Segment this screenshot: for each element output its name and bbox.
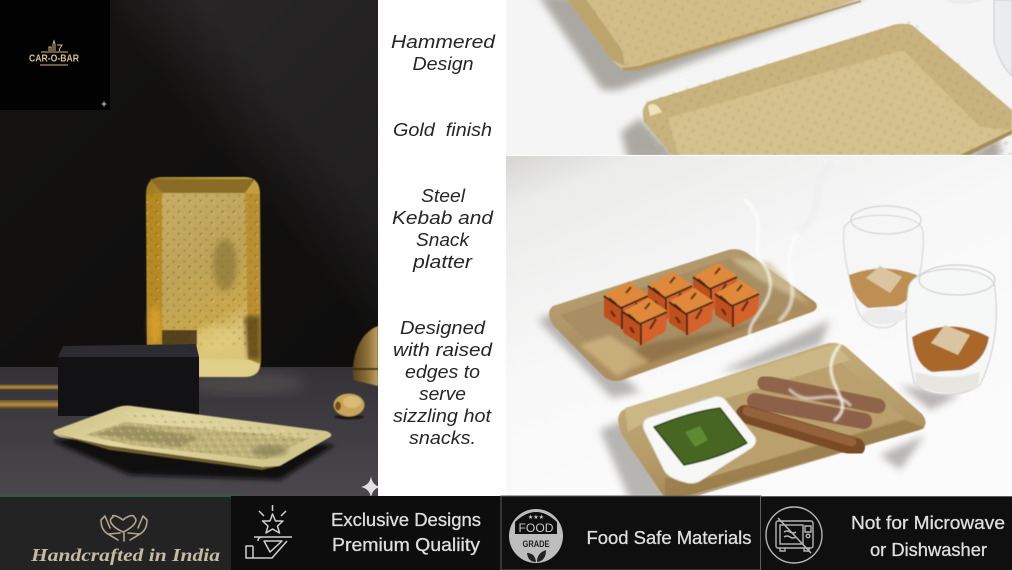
icon: crossed microwave bbox=[766, 507, 822, 563]
feature: steel kebab and snack platter: Snack bbox=[416, 230, 470, 250]
icon: food grade seal: FOOD bbox=[518, 523, 554, 535]
black block bbox=[58, 344, 199, 416]
feature: hammered design: Hammered bbox=[391, 32, 496, 52]
badge: handcrafted in india bbox=[0, 495, 245, 570]
olive bbox=[334, 394, 364, 420]
upper tray bbox=[566, 0, 861, 71]
glass fragments bbox=[945, 0, 1012, 76]
panel: dark product photo bbox=[0, 0, 380, 498]
tandoori platter bbox=[549, 249, 817, 381]
tray shadows bbox=[538, 0, 1000, 160]
feature: raised edges: sizzling hot bbox=[393, 406, 492, 426]
kebab platter bbox=[618, 343, 926, 498]
lower tray bbox=[640, 20, 1012, 160]
kebabs bbox=[745, 383, 878, 447]
flat tray shadow bbox=[52, 437, 334, 482]
feature list column bbox=[378, 0, 506, 496]
feature: raised edges bbox=[393, 318, 493, 448]
chutney bowl bbox=[643, 397, 756, 483]
badge: exclusive designs bbox=[231, 496, 501, 570]
text: food safe materials: Food Safe Materials bbox=[586, 528, 752, 548]
sparkle bbox=[361, 476, 378, 496]
flat hammered tray bbox=[53, 406, 331, 470]
badge text: Handcrafted in India bbox=[30, 545, 220, 565]
feature: raised edges: snacks. bbox=[409, 428, 476, 448]
feature: raised edges: edges to bbox=[405, 362, 480, 382]
logo sparkle bbox=[101, 101, 107, 107]
badge: not for microwave bbox=[760, 496, 1012, 570]
feature: steel kebab and snack platter: Kebab and bbox=[392, 208, 494, 228]
text: exclusive designs: Exclusive Designs bbox=[331, 510, 481, 530]
feature: hammered design bbox=[391, 32, 496, 74]
icon: food grade seal bbox=[509, 509, 563, 563]
icon: star on tray bbox=[246, 505, 292, 558]
standing hammered tray bbox=[146, 177, 261, 377]
feature: steel kebab and snack platter bbox=[392, 186, 494, 272]
feature: raised edges: serve bbox=[419, 384, 466, 404]
logo wordmark: CAR-O-BAR bbox=[29, 54, 80, 64]
paneer cubes bbox=[604, 263, 759, 345]
text: or dishwasher: or Dishwasher bbox=[870, 540, 987, 560]
feature: steel kebab and snack platter: Steel bbox=[421, 186, 466, 206]
feature: steel kebab and snack platter: platter bbox=[412, 252, 473, 272]
brass rods bbox=[0, 384, 58, 409]
brass dome bbox=[353, 326, 378, 386]
icon: food grade seal: GRADE bbox=[522, 539, 550, 550]
tray shadows bbox=[538, 312, 960, 500]
feature: gold finish: Gold finish bbox=[393, 120, 492, 140]
feature: hammered design: Design bbox=[412, 54, 474, 74]
logo bottle mark bbox=[40, 41, 68, 65]
whisky glass left bbox=[844, 206, 923, 328]
feature: raised edges: Designed bbox=[400, 318, 486, 338]
rising smoke bbox=[746, 258, 853, 423]
icon: food grade seal: ★★★ bbox=[528, 514, 544, 521]
text: not for microwave: Not for Microwave bbox=[851, 513, 1005, 533]
whisky glass right bbox=[906, 265, 996, 394]
text: premium quality: Premium Qualiity bbox=[332, 535, 480, 555]
bottom features bar bbox=[0, 495, 1012, 570]
logo block bbox=[0, 0, 110, 110]
panel: top-right tray close-up bbox=[506, 0, 1012, 160]
panel: food photo bbox=[506, 156, 1012, 500]
badge: food safe materials bbox=[501, 496, 761, 570]
feature: raised edges: with raised bbox=[393, 340, 493, 360]
icon: hands holding heart bbox=[101, 516, 147, 541]
